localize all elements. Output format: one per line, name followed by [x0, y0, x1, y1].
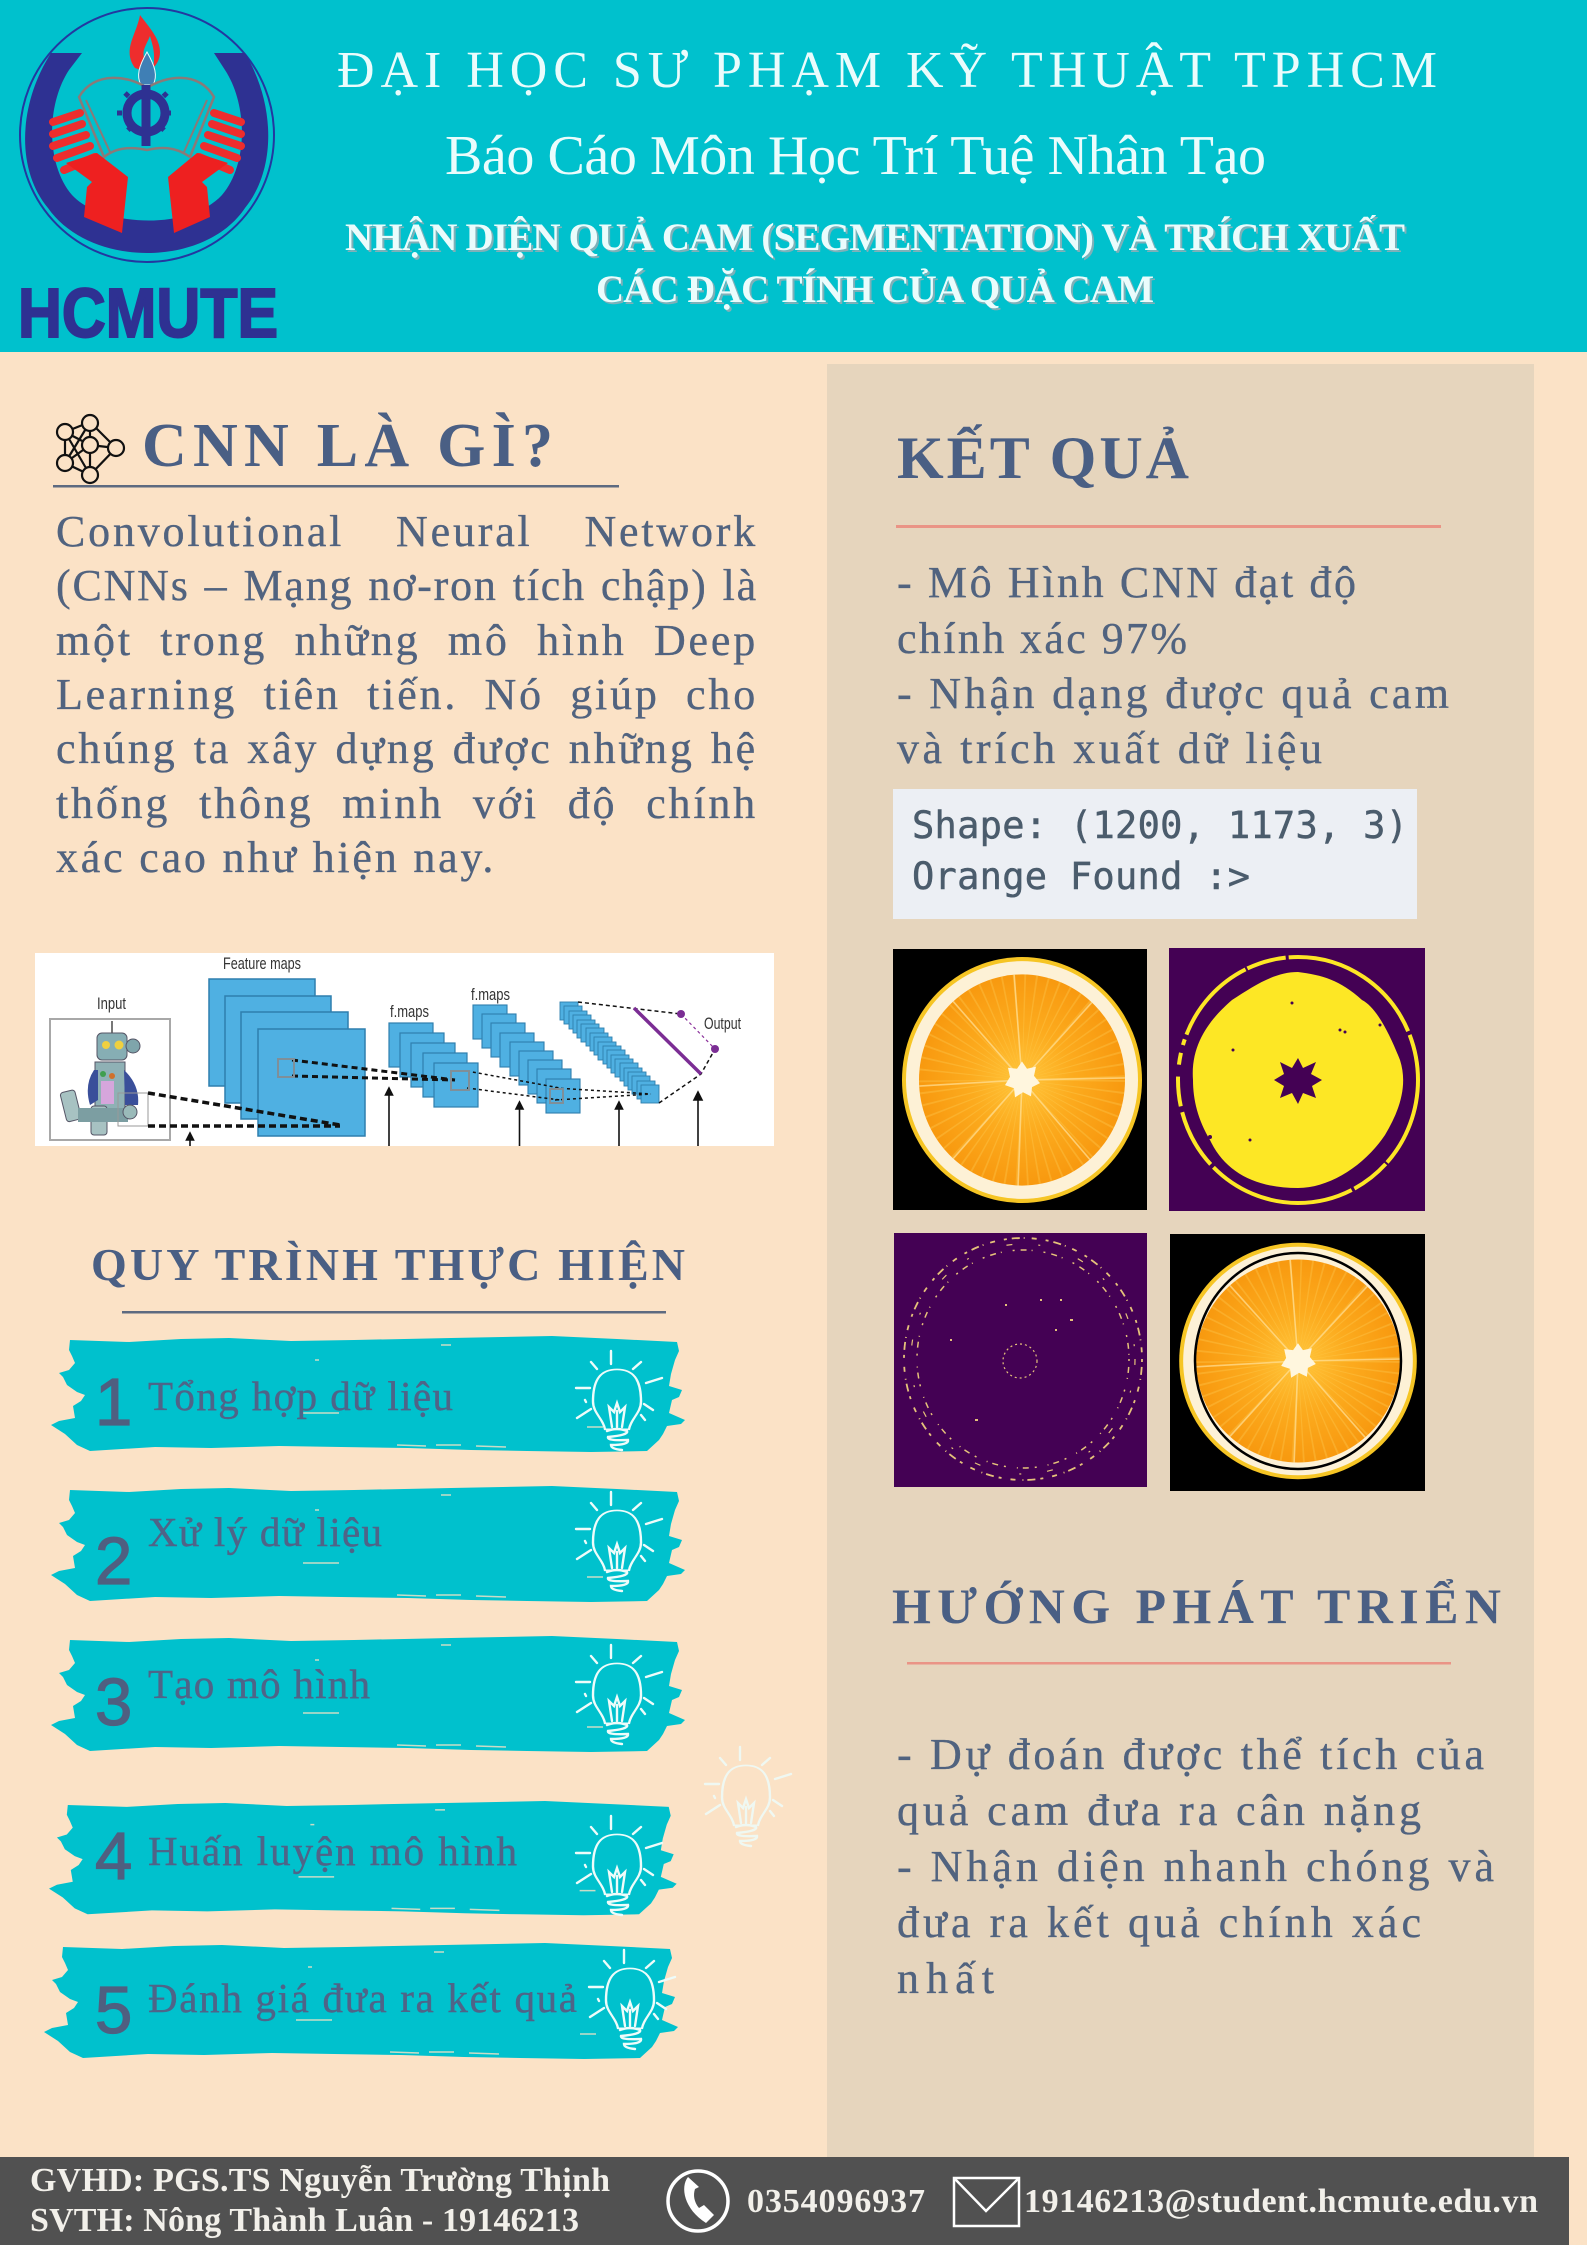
label: Feature maps: Feature maps — [223, 954, 301, 973]
footer: supervisor and student: GVHD: PGS.TS Nguyễn Trường Thịnh — [30, 2162, 610, 2199]
text block: CNN description: xác cao như hiện nay. — [56, 833, 496, 882]
step 1 banner: Tổng hợp dữ liệu — [148, 1373, 453, 1419]
results text: - Mô Hình CNN đạt độ — [897, 558, 1356, 607]
project title: CÁC ĐẶC TÍNH CỦA QUẢ CAM — [596, 267, 1154, 311]
step 4 banner: 4 — [95, 1819, 132, 1894]
step 2 banner: Xử lý dữ liệu — [148, 1509, 382, 1555]
heading: quy trình thực hiện: QUY TRÌNH THỰC HIỆN — [91, 1239, 685, 1290]
step 5 banner: 5 — [95, 1973, 132, 2048]
image: edge map — [894, 1233, 1147, 1487]
icon: envelope — [954, 2178, 1019, 2226]
heading: kết quả: KẾT QUẢ — [897, 425, 1189, 491]
footer band — [0, 2157, 1569, 2245]
step 2 banner — [51, 1486, 685, 1602]
console output box: Orange Found :> — [912, 855, 1250, 898]
step 3 banner: 3 — [95, 1665, 132, 1740]
development text: đưa ra kết quả chính xác — [897, 1898, 1421, 1947]
results text — [897, 558, 1449, 773]
feature map stack 4 — [560, 1002, 659, 1103]
development text: - Nhận diện nhanh chóng và — [897, 1842, 1494, 1891]
label: Input: Input — [97, 994, 126, 1013]
step 3 banner — [51, 1636, 685, 1752]
step 1 banner — [51, 1336, 685, 1452]
subtitle: course report: Báo Cáo Môn Học Trí Tuệ Nhân Tạo — [445, 125, 1266, 187]
panel: right column background — [827, 364, 1534, 2157]
image: segmented mask — [1169, 948, 1425, 1211]
step 5 banner: Đánh giá đưa ra kết quả — [148, 1975, 577, 2021]
image: detected circle — [1170, 1234, 1425, 1491]
text block: CNN description — [56, 507, 758, 882]
text block: CNN description: một trong những mô hình Deep — [56, 616, 758, 665]
step 5 banner — [44, 1943, 678, 2059]
console output box — [893, 789, 1417, 919]
text block: CNN description: Convolutional Neural Network — [56, 507, 758, 556]
phone number: 0354096937 — [747, 2183, 925, 2220]
heading: hướng phát triển: HƯỚNG PHÁT TRIỂN — [892, 1577, 1501, 1634]
feature map stack 1 — [209, 979, 365, 1136]
results text: và trích xuất dữ liệu — [897, 724, 1322, 773]
title: university name: ĐẠI HỌC SƯ PHẠM KỸ THUẬT TPHCM — [337, 41, 1437, 99]
text block: CNN description: chúng ta xây dựng được những hệ — [56, 724, 758, 773]
label: Output: Output — [704, 1014, 741, 1033]
step 1 banner: 1 — [95, 1365, 132, 1440]
logo: HCMUTE emblem — [18, 8, 278, 352]
step 2 banner: 2 — [95, 1524, 132, 1599]
step 3 banner: Tạo mô hình — [148, 1661, 370, 1707]
footer band: SVTH: Nông Thành Luân - 19146213 — [30, 2202, 579, 2239]
logo wordmark: HCMUTE — [18, 274, 278, 352]
development text: - Dự đoán được thể tích của — [897, 1730, 1484, 1779]
diagram: CNN architecture — [35, 953, 774, 1146]
feature map stack 3 — [473, 1005, 580, 1113]
heading: CNN là gì: CNN LÀ GÌ? — [142, 412, 553, 480]
step 4 banner — [49, 1801, 677, 1915]
text block: CNN description: thống thông minh với độ chính — [56, 779, 758, 828]
icon: standalone light bulb — [705, 1747, 791, 1846]
step 4 banner: Huấn luyện mô hình — [148, 1828, 517, 1874]
connector lines — [148, 1002, 715, 1126]
header band — [0, 0, 1587, 352]
development text — [897, 1730, 1494, 2003]
console output box: Shape: (1200, 1173, 3) — [912, 804, 1408, 847]
label: f.maps: f.maps — [390, 1002, 429, 1021]
project title — [345, 214, 1405, 311]
email: 19146213@student.hcmute.edu.vn — [1024, 2183, 1538, 2220]
image: original orange — [893, 949, 1147, 1210]
input box with robot — [50, 1019, 170, 1140]
results text: chính xác 97% — [897, 614, 1187, 663]
icon: neural network — [57, 415, 124, 483]
project title: NHẬN DIỆN QUẢ CAM (SEGMENTATION) VÀ TRÍCH XUẤT — [345, 214, 1405, 259]
feature map stack 2 — [389, 1023, 478, 1107]
results text: - Nhận dạng được quả cam — [897, 669, 1449, 718]
development text: nhất — [897, 1954, 994, 2003]
text block: CNN description: Learning tiên tiến. Nó giúp cho — [56, 670, 758, 719]
arrows — [186, 1088, 702, 1146]
icon: phone — [668, 2171, 728, 2231]
development text: quả cam đưa ra cân nặng — [897, 1786, 1421, 1835]
label: f.maps second: f.maps — [471, 985, 510, 1004]
text block: CNN description: (CNNs – Mạng nơ-ron tích chập) là — [56, 561, 758, 610]
